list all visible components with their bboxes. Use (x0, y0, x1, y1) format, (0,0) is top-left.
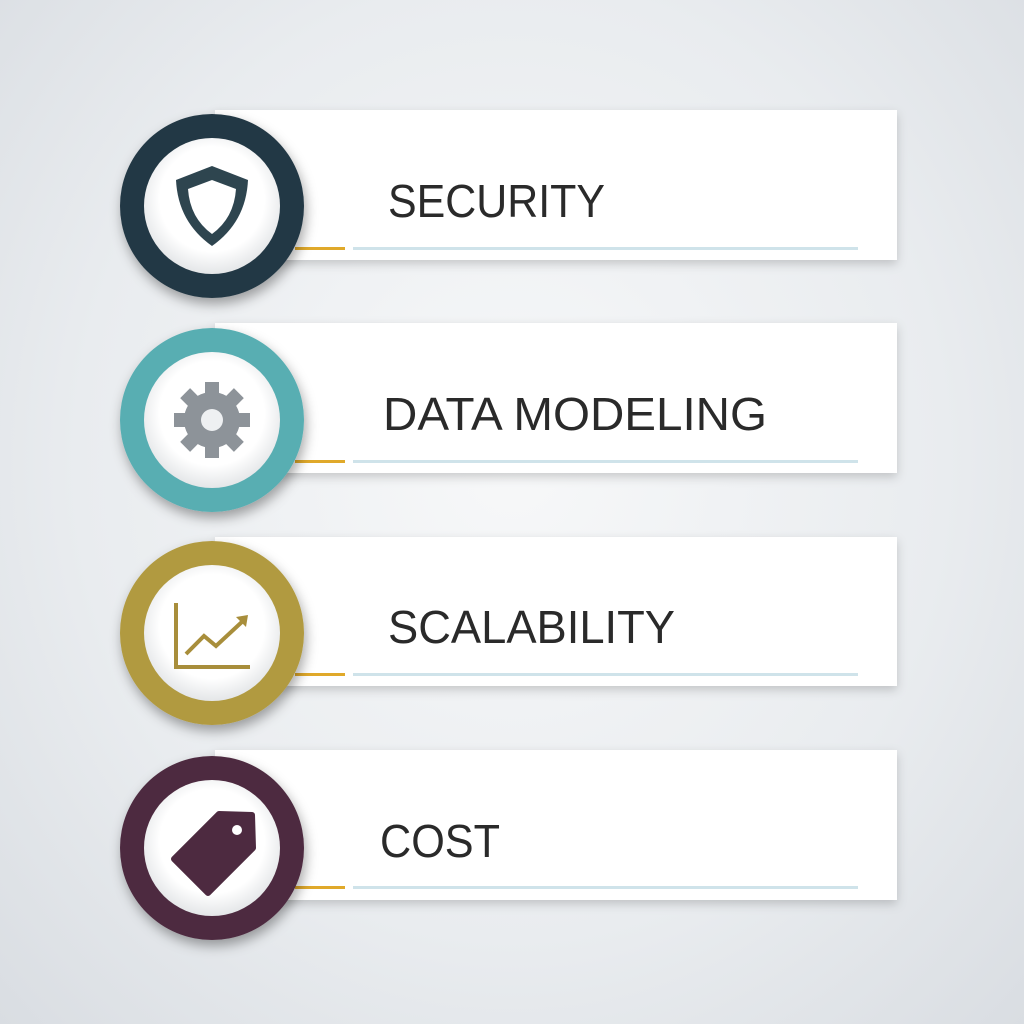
icon circle: security shield (120, 114, 304, 298)
card: scalability: SCALABILITY (388, 601, 675, 653)
card: cost (215, 750, 897, 900)
card: cost: COST (380, 815, 500, 867)
card: data modeling (215, 323, 897, 473)
card: data modeling: DATA MODELING (383, 388, 767, 440)
card: scalability (215, 537, 897, 686)
card: security: SECURITY (388, 175, 605, 227)
card: security (215, 110, 897, 260)
icon circle: data modeling gear (120, 328, 304, 512)
icon circle: scalability chart (120, 541, 304, 725)
icon circle: cost tag (120, 756, 304, 940)
